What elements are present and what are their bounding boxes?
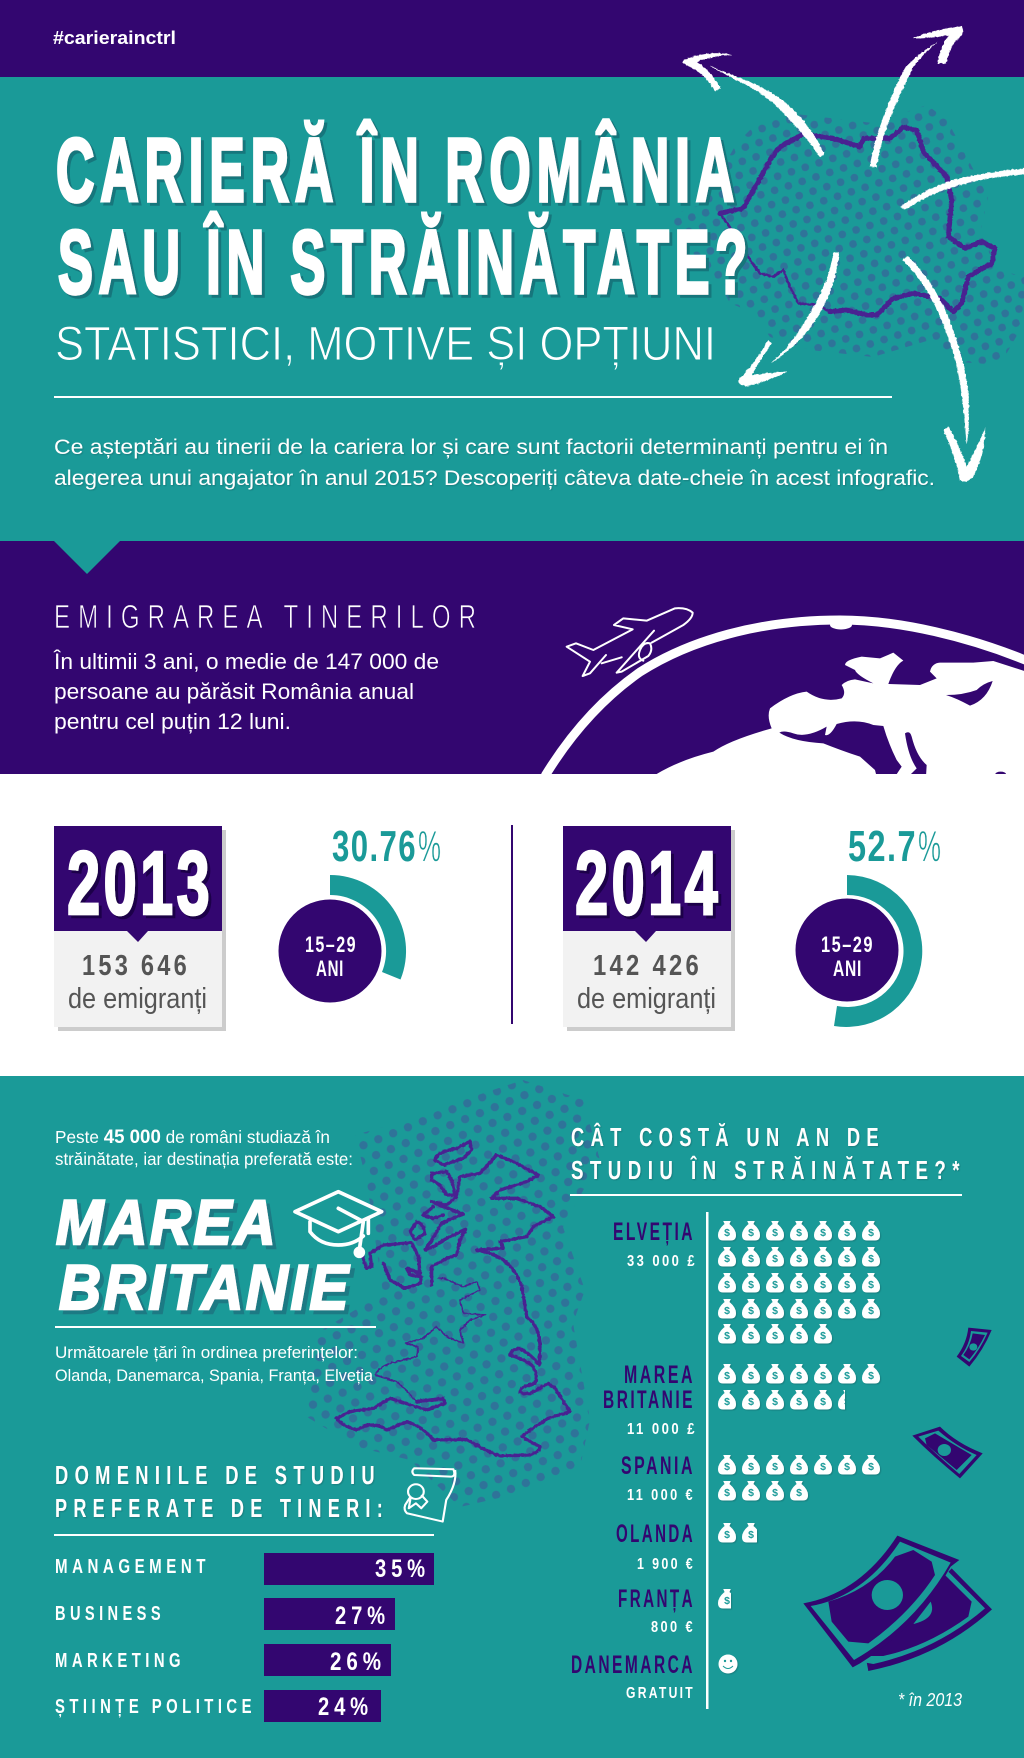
- text: students abroad: Peste 45 000 de români studiază în: [55, 1127, 330, 1148]
- donut: 52.7%: ANI: [833, 956, 862, 981]
- label: Franța: [618, 1585, 695, 1636]
- footnote: * în 2013: [898, 1690, 962, 1710]
- bags: Marea Britanie: [718, 1364, 880, 1410]
- label: Danemarca: DANEMARCA: [571, 1651, 695, 1679]
- label: Elveția: 33 000 £: [627, 1253, 697, 1270]
- label: Danemarca: GRATUIT: [626, 1685, 695, 1702]
- donut: 52.7%: %: [918, 822, 941, 871]
- icon: graduation cap: [295, 1192, 382, 1256]
- bar: marketing: MARKETING: [55, 1650, 185, 1672]
- text: students abroad: străinătate, iar destinația preferată este:: [55, 1149, 353, 1169]
- rule: [55, 1326, 376, 1328]
- arrow: east: [901, 168, 1024, 210]
- bar: management: 35%: [375, 1555, 430, 1583]
- label: Marea Britanie: 11 000 £: [627, 1421, 697, 1438]
- label: Danemarca: [571, 1651, 695, 1702]
- heading: fields of study: DOMENIILE DE STUDIU: [55, 1460, 381, 1490]
- card: 2013: [54, 826, 226, 1031]
- heading: cost of study: [571, 1122, 966, 1185]
- halftone Romania dots: [666, 105, 1024, 365]
- bags: Franța: [718, 1589, 732, 1610]
- chalk arrows: [683, 27, 1024, 481]
- donut: 30.76%: ANI: [316, 956, 344, 981]
- country labels: [571, 1218, 697, 1702]
- rule: [54, 1534, 434, 1536]
- label: Franța: 800 €: [651, 1619, 695, 1636]
- text: next countries: Următoarele țări în ordinea preferințelor:: [55, 1343, 358, 1362]
- donut: 52.7%: [796, 822, 941, 1027]
- title: [56, 119, 753, 313]
- pictogram: money bags: [718, 1221, 880, 1674]
- bar: management: [55, 1553, 434, 1585]
- emigration text: [53, 649, 439, 734]
- icon: smiley: [718, 1654, 738, 1674]
- label: Spania: [621, 1452, 695, 1504]
- label: Olanda: OLANDA: [616, 1520, 695, 1548]
- panel: emigration: [0, 541, 1024, 777]
- donut: 30.76%: 15–29: [305, 932, 357, 957]
- icon: medium banknote: [912, 1427, 983, 1478]
- bar: political science: [55, 1690, 381, 1722]
- heading: emigrarea tinerilor: EMIGRAREA TINERILOR: [54, 598, 484, 635]
- bar: political science: 24%: [318, 1693, 373, 1721]
- card: 2014: [563, 826, 735, 1031]
- panel: statistics: [0, 774, 1024, 1076]
- bags: Elveția: [718, 1221, 880, 1344]
- card: 2013: 153 646: [82, 950, 190, 982]
- heading: Marea Britanie: MAREA: [56, 1188, 278, 1258]
- intro paragraph: [54, 435, 935, 490]
- card: 2013: 2013: [67, 834, 213, 934]
- label: Olanda: 1 900 €: [637, 1556, 695, 1573]
- label: Marea Britanie: [603, 1361, 697, 1438]
- label: Marea Britanie: MAREA: [624, 1361, 695, 1389]
- donut: 52.7%: 15–29: [821, 932, 874, 957]
- card: 2014: de emigranți: [577, 983, 716, 1015]
- icon: large banknotes: [803, 1536, 992, 1671]
- map: Romania outline: [720, 127, 995, 315]
- card: 2013: de emigranți: [68, 983, 207, 1015]
- donut: 30.76%: %: [418, 822, 441, 871]
- panel: studies background: [0, 1076, 1024, 1758]
- axis line: [706, 1212, 708, 1709]
- arrow: south-east: [903, 256, 985, 481]
- bar: business: 27%: [335, 1602, 390, 1630]
- emigration text: În ultimii 3 ani, o medie de 147 000 de: [53, 649, 439, 674]
- bags: Olanda: [718, 1523, 760, 1542]
- intro paragraph: Ce așteptări au tinerii de la cariera lor și care sunt factorii determinanți pentru ei în: [54, 435, 888, 459]
- hashtag: #carierainctrl: [53, 28, 176, 48]
- donut: 30.76%: 30.76: [332, 822, 417, 871]
- card: 2014: 142 426: [593, 950, 702, 982]
- label: Spania: 11 000 €: [627, 1487, 695, 1504]
- intro paragraph: alegerea unui angajator în anul 2015? Descoperiți câteva date-cheie în acest infografic.: [54, 466, 935, 490]
- text: next countries: [55, 1343, 374, 1385]
- donut: 30.76%: [278, 822, 441, 1002]
- heading: Marea Britanie: BRITANIE: [59, 1253, 351, 1323]
- bar: business: BUSINESS: [55, 1603, 165, 1625]
- icons: banknotes: [803, 1328, 992, 1671]
- map: United Kingdom outline: [336, 1142, 570, 1456]
- heading: Marea Britanie: [56, 1188, 351, 1323]
- bar chart: fields of study: [55, 1553, 434, 1722]
- heading: fields of study: [55, 1460, 389, 1523]
- card: 2014: 2014: [575, 834, 721, 934]
- subtitle: STATISTICI, MOTIVE ȘI OPȚIUNI: [55, 318, 716, 371]
- label: Franța: FRANȚA: [618, 1585, 695, 1613]
- heading: fields of study: PREFERATE DE TINERI:: [55, 1493, 389, 1523]
- notch triangle: [54, 541, 120, 574]
- header rule: [54, 396, 892, 398]
- illustration: globe: [545, 620, 1024, 777]
- label: Spania: SPANIA: [621, 1452, 695, 1480]
- arrow: south-west: [738, 253, 839, 386]
- divider: [511, 825, 513, 1024]
- bar: management: MANAGEMENT: [55, 1556, 210, 1578]
- rule: [570, 1194, 962, 1196]
- text: next countries: Olanda, Danemarca, Spania, Franța, Elveția: [55, 1366, 374, 1385]
- heading: cost of study: CÂT COSTĂ UN AN DE: [571, 1122, 885, 1152]
- icon: plane: [567, 608, 693, 676]
- icon: diploma scroll: [405, 1468, 455, 1522]
- bar: marketing: [55, 1644, 391, 1676]
- text: students abroad: [55, 1127, 353, 1169]
- label: Elveția: [613, 1218, 697, 1270]
- arrow: north-east: [870, 27, 963, 167]
- emigration text: persoane au părăsit România anual: [54, 679, 414, 704]
- arrow: north-west: [683, 53, 824, 157]
- halftone UK dots: [307, 1080, 600, 1507]
- donut: 52.7%: 52.7: [848, 822, 917, 871]
- label: Elveția: ELVEȚIA: [613, 1218, 695, 1246]
- panel: header background: [0, 0, 1024, 541]
- label: Olanda: [616, 1520, 695, 1573]
- label: Marea Britanie: BRITANIE: [603, 1386, 695, 1414]
- bags: Spania: [718, 1455, 880, 1500]
- bar: business: [55, 1598, 395, 1630]
- emigration text: pentru cel puțin 12 luni.: [54, 709, 291, 734]
- bar: marketing: 26%: [330, 1648, 386, 1676]
- icon: small banknote top: [957, 1328, 992, 1367]
- bar: political science: ȘTIINȚE POLITICE: [55, 1696, 256, 1718]
